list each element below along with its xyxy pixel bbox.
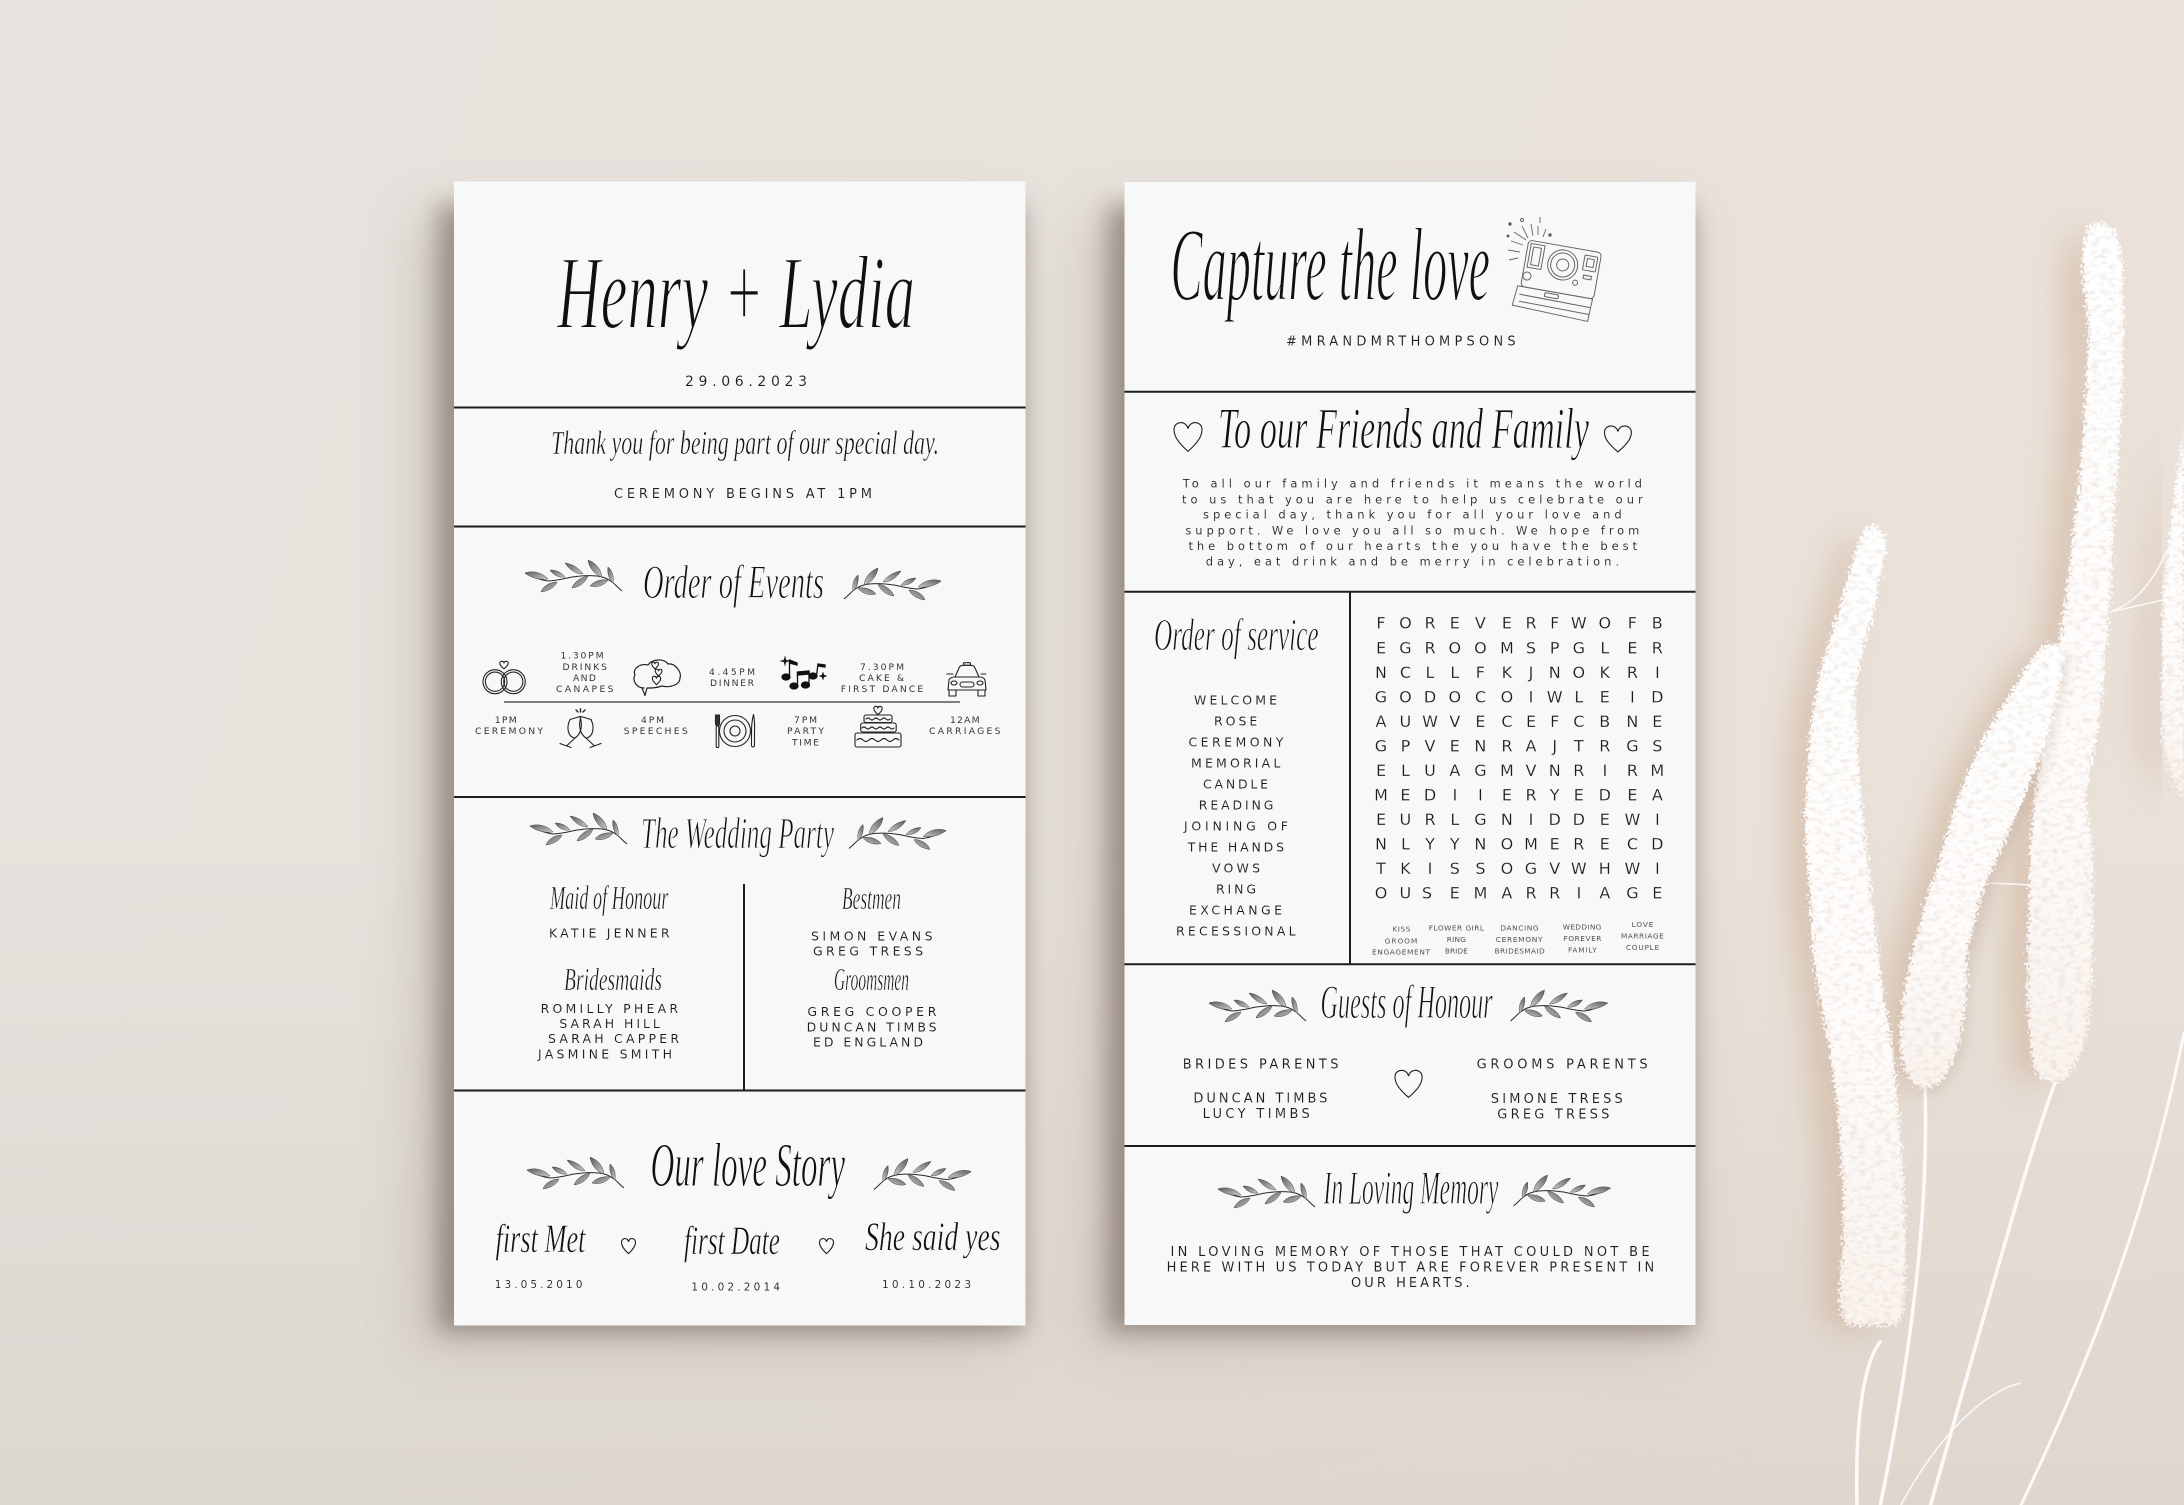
icon: taxi car	[947, 663, 986, 696]
column: brides parents: DUNCAN TIMBS	[1193, 1091, 1327, 1106]
panel: our love story	[495, 1132, 1001, 1294]
list: service items: EXCHANGE	[1189, 902, 1282, 917]
list: service items: CEREMONY	[1188, 735, 1284, 750]
label: dinner: DINNER	[710, 678, 755, 689]
subheading: bridesmaids: Bridesmaids	[564, 961, 662, 997]
list: service items: ROSE	[1214, 714, 1257, 729]
word list: ENGAGEMENT	[1372, 948, 1430, 957]
label: party time: 7PM	[794, 715, 817, 726]
icon: sprig right	[1514, 1175, 1610, 1207]
panel: order of events	[475, 556, 1001, 748]
paragraph: thanks message: support. We love you all so much. We hope from	[1185, 523, 1639, 537]
names: bridesmaids	[537, 1001, 679, 1062]
names: groomsmen	[807, 1004, 937, 1049]
word list: BRIDE	[1445, 946, 1468, 955]
panel: in loving memory	[1167, 1162, 1654, 1291]
panel: order of service	[1154, 609, 1319, 938]
icon: sprig left	[530, 813, 627, 845]
word list: FLOWER GIRL	[1429, 924, 1485, 933]
word list: FAMILY	[1568, 946, 1597, 955]
paragraph: thanks message: the bottom of our hearts the you have the best	[1188, 539, 1637, 553]
list: service items: WELCOME	[1194, 693, 1277, 708]
word search grid: MEDIIERYEDEA	[1374, 785, 1663, 804]
plume: middle	[1900, 644, 2065, 1088]
word search grid: EGROOMSPGLER	[1376, 639, 1663, 658]
word search grid: EURLGNIDDEWI	[1376, 810, 1660, 829]
plume: edge right	[2162, 425, 2184, 800]
word search grid: GODOCOIWLEID	[1375, 687, 1663, 706]
label: party time	[787, 715, 824, 748]
names: bestmen	[811, 928, 933, 958]
plume: tall right	[2027, 223, 2124, 1083]
icon: wedding cake	[855, 706, 901, 747]
label: drinks and canapes: DRINKS	[562, 662, 607, 673]
label: ceremony: CEREMONY	[475, 726, 543, 737]
milestone: first met: 13.05.2010	[495, 1279, 582, 1291]
list: service items: CANDLE	[1203, 777, 1268, 792]
column: grooms parents: SIMONE TRESS	[1491, 1092, 1623, 1107]
milestone: first date: 10.02.2014	[691, 1282, 780, 1294]
paragraph: thanks message: To all our family and friends it means the world	[1182, 477, 1642, 491]
column: grooms parents: GROOMS PARENTS	[1477, 1058, 1648, 1073]
section divider lines left	[454, 408, 1026, 1090]
milestone: she said yes: She said yes	[865, 1214, 1001, 1259]
title: Henry + Lydia: Henry + Lydia	[556, 234, 915, 351]
milestone: she said yes: 10.10.2023	[882, 1279, 971, 1291]
word search grid	[1374, 613, 1664, 902]
label: speeches: SPEECHES	[624, 726, 688, 737]
word list: BRIDESMAID	[1495, 946, 1545, 955]
heading: our love story: Our love Story	[650, 1132, 845, 1200]
hashtag: #MRANDMRTHOMPSONS	[1286, 334, 1516, 349]
label: drinks and canapes: CANAPES	[556, 684, 614, 695]
panel: friends and family message	[1174, 396, 1643, 569]
paragraph: thanks message: special day, thank you for all your love and	[1203, 508, 1622, 522]
word list: DANCING	[1500, 924, 1539, 933]
icon: heart	[1395, 1070, 1422, 1097]
card shadow left	[415, 205, 1023, 1345]
column: brides parents: BRIDES PARENTS	[1183, 1058, 1338, 1073]
date: 29.06.2023	[685, 374, 807, 390]
label: cake and first dance: CAKE &	[859, 673, 904, 684]
list: service items	[1176, 693, 1296, 938]
label: cake and first dance: 7.30PM	[860, 662, 904, 673]
label: speeches	[624, 715, 688, 737]
column: grooms parents: GREG TRESS	[1497, 1108, 1609, 1123]
label: party time: TIME	[791, 738, 819, 748]
paragraph: memorial: IN LOVING MEMORY OF THOSE THAT COULD NOT BE	[1170, 1245, 1650, 1260]
icon: heart	[622, 1239, 636, 1254]
label: drinks and canapes: AND	[573, 673, 596, 684]
word list: WEDDING	[1563, 923, 1602, 932]
plume shadows	[1785, 231, 2162, 1331]
panel: left programme card	[415, 182, 1026, 1345]
panel: word search	[1372, 613, 1664, 957]
list: service items: MEMORIAL	[1191, 756, 1280, 771]
icon: champagne glasses	[560, 709, 601, 748]
paragraph: memorial: HERE WITH US TODAY BUT ARE FOREVER PRESENT IN	[1167, 1260, 1654, 1275]
panel: in loving memory: In Loving Memory	[1323, 1162, 1499, 1215]
heading: order of events: Order of Events	[643, 556, 824, 609]
section divider lines right	[1124, 392, 1696, 1146]
label: speeches: 4PM	[641, 715, 664, 726]
names: bestmen: SIMON EVANS	[811, 928, 933, 943]
icon: sprig left	[525, 560, 622, 592]
paragraph: memorial	[1167, 1245, 1654, 1291]
text: ceremony begins: CEREMONY BEGINS AT 1PM	[614, 487, 872, 502]
heading: guests of honour: Guests of Honour	[1320, 976, 1493, 1029]
label: ceremony: 1PM	[495, 715, 517, 726]
panel: wedding party	[530, 809, 946, 1062]
word list: MARRIAGE	[1621, 931, 1664, 940]
names: maid of honour: KATIE JENNER	[549, 926, 670, 940]
panel: right programme card: Capture the love	[1170, 206, 1490, 323]
word search grid: NLYYNOMERECD	[1375, 834, 1663, 853]
names: bridesmaids: SARAH HILL	[559, 1016, 660, 1031]
panel: right programme card	[1085, 182, 1696, 1345]
word list: GROOM	[1385, 936, 1417, 945]
plume stems	[1857, 550, 2184, 1505]
word search grid: ELUAGMVNRIRM	[1376, 761, 1664, 780]
word search grid: GPVENRAJTRGS	[1375, 736, 1662, 755]
word search grid: TKISSOGVWHWI	[1375, 859, 1660, 878]
word list	[1372, 920, 1664, 957]
icon: sprig right	[1510, 990, 1608, 1022]
names: groomsmen: GREG COOPER	[807, 1004, 937, 1019]
timeline axis	[504, 701, 960, 703]
column: brides parents: LUCY TIMBS	[1203, 1107, 1310, 1122]
names: bridesmaids: SARAH CAPPER	[548, 1031, 679, 1046]
icon: heart left	[1174, 423, 1202, 451]
plume: left	[1805, 525, 1906, 1325]
icon: sprig left	[527, 1157, 624, 1189]
label: dinner	[709, 667, 755, 689]
label: cake and first dance: FIRST DANCE	[841, 684, 923, 695]
icon: wedding rings	[483, 661, 525, 694]
list: service items: READING	[1199, 798, 1273, 813]
word search grid: FOREVERFWOFB	[1376, 613, 1663, 632]
names: groomsmen: ED ENGLAND	[813, 1034, 923, 1049]
word list: FOREVER	[1564, 934, 1601, 943]
label: cake and first dance	[841, 662, 923, 695]
icon: speech cloud	[634, 660, 680, 696]
list: service items: RING	[1216, 881, 1256, 896]
list: service items: RECESSIONAL	[1176, 923, 1296, 938]
icon: sprig right	[844, 568, 941, 600]
paragraph: thanks message: day, eat drink and be merry in celebration.	[1206, 555, 1619, 569]
panel: wedding party: Groomsmen	[834, 961, 909, 997]
icon: sprig right	[849, 818, 946, 850]
names: bridesmaids: JASMINE SMITH	[537, 1047, 672, 1062]
list: service items: VOWS	[1212, 861, 1260, 876]
names: bridesmaids: ROMILLY PHEAR	[541, 1001, 678, 1016]
word list: CEREMONY	[1496, 935, 1543, 944]
icon: instant camera	[1507, 217, 1602, 322]
icon: music notes	[780, 656, 827, 689]
names: groomsmen: DUNCAN TIMBS	[807, 1019, 937, 1034]
heading: to our friends and family: To our Friends and Family	[1218, 396, 1589, 461]
word search grid: NCLLFKJNOKRI	[1375, 663, 1660, 682]
label: ceremony	[475, 715, 543, 737]
card sheet right	[1124, 182, 1696, 1325]
word list: RING	[1447, 935, 1466, 944]
heading: the wedding party: The Wedding Party	[641, 809, 834, 858]
label: party time: PARTY	[787, 726, 824, 737]
word search grid: OUSEMARRIAGE	[1375, 883, 1662, 902]
names: bestmen: GREG TRESS	[813, 943, 923, 958]
label: drinks and canapes: 1.30PM	[560, 651, 604, 662]
subheading: bestmen: Bestmen	[842, 880, 901, 916]
icon: plate and cutlery	[716, 714, 755, 748]
paragraph: thanks message: to us that you are here to help us celebrate our	[1182, 492, 1643, 506]
panel: guests of honour	[1183, 976, 1648, 1123]
label: carriages: 12AM	[950, 715, 980, 726]
card shadow right	[1085, 205, 1693, 1345]
label: carriages	[929, 715, 1001, 737]
icon: heart right	[1604, 426, 1631, 452]
milestone: first date	[684, 1218, 780, 1294]
icon: heart	[820, 1239, 834, 1254]
column: brides parents	[1183, 1058, 1338, 1122]
column: grooms parents	[1477, 1058, 1648, 1123]
milestone: first date: first Date	[684, 1218, 780, 1263]
icon: sprig left	[1218, 1176, 1315, 1208]
label: drinks and canapes	[556, 651, 614, 695]
paragraph: memorial: OUR HEARTS.	[1351, 1276, 1470, 1291]
milestone: first met	[495, 1216, 586, 1291]
word list: LOVE	[1632, 920, 1654, 929]
paragraph: thanks message	[1182, 477, 1643, 569]
list: service items: THE HANDS	[1187, 840, 1284, 855]
heading: order of service: Order of service	[1154, 609, 1319, 660]
subheading: maid of honour: Maid of Honour	[549, 880, 669, 917]
word list: COUPLE	[1626, 943, 1660, 952]
icon: sprig right	[874, 1158, 971, 1190]
label: carriages: CARRIAGES	[929, 726, 1001, 737]
milestone: she said yes	[865, 1214, 1001, 1291]
shadow of middle plume on neighbours	[1905, 651, 2070, 1092]
card sheet left	[454, 182, 1026, 1326]
word search grid: AUWVECEFCBNE	[1376, 712, 1662, 731]
script: thank you: Thank you for being part of our special day.	[551, 425, 939, 462]
list: service items: JOINING OF	[1183, 819, 1288, 834]
word list: KISS	[1392, 924, 1411, 933]
label: dinner: 4.45PM	[709, 667, 755, 678]
milestone: first met: first Met	[496, 1216, 586, 1261]
icon: sprig left	[1209, 990, 1306, 1022]
decoration: dried pampas plumes	[1785, 223, 2184, 1505]
